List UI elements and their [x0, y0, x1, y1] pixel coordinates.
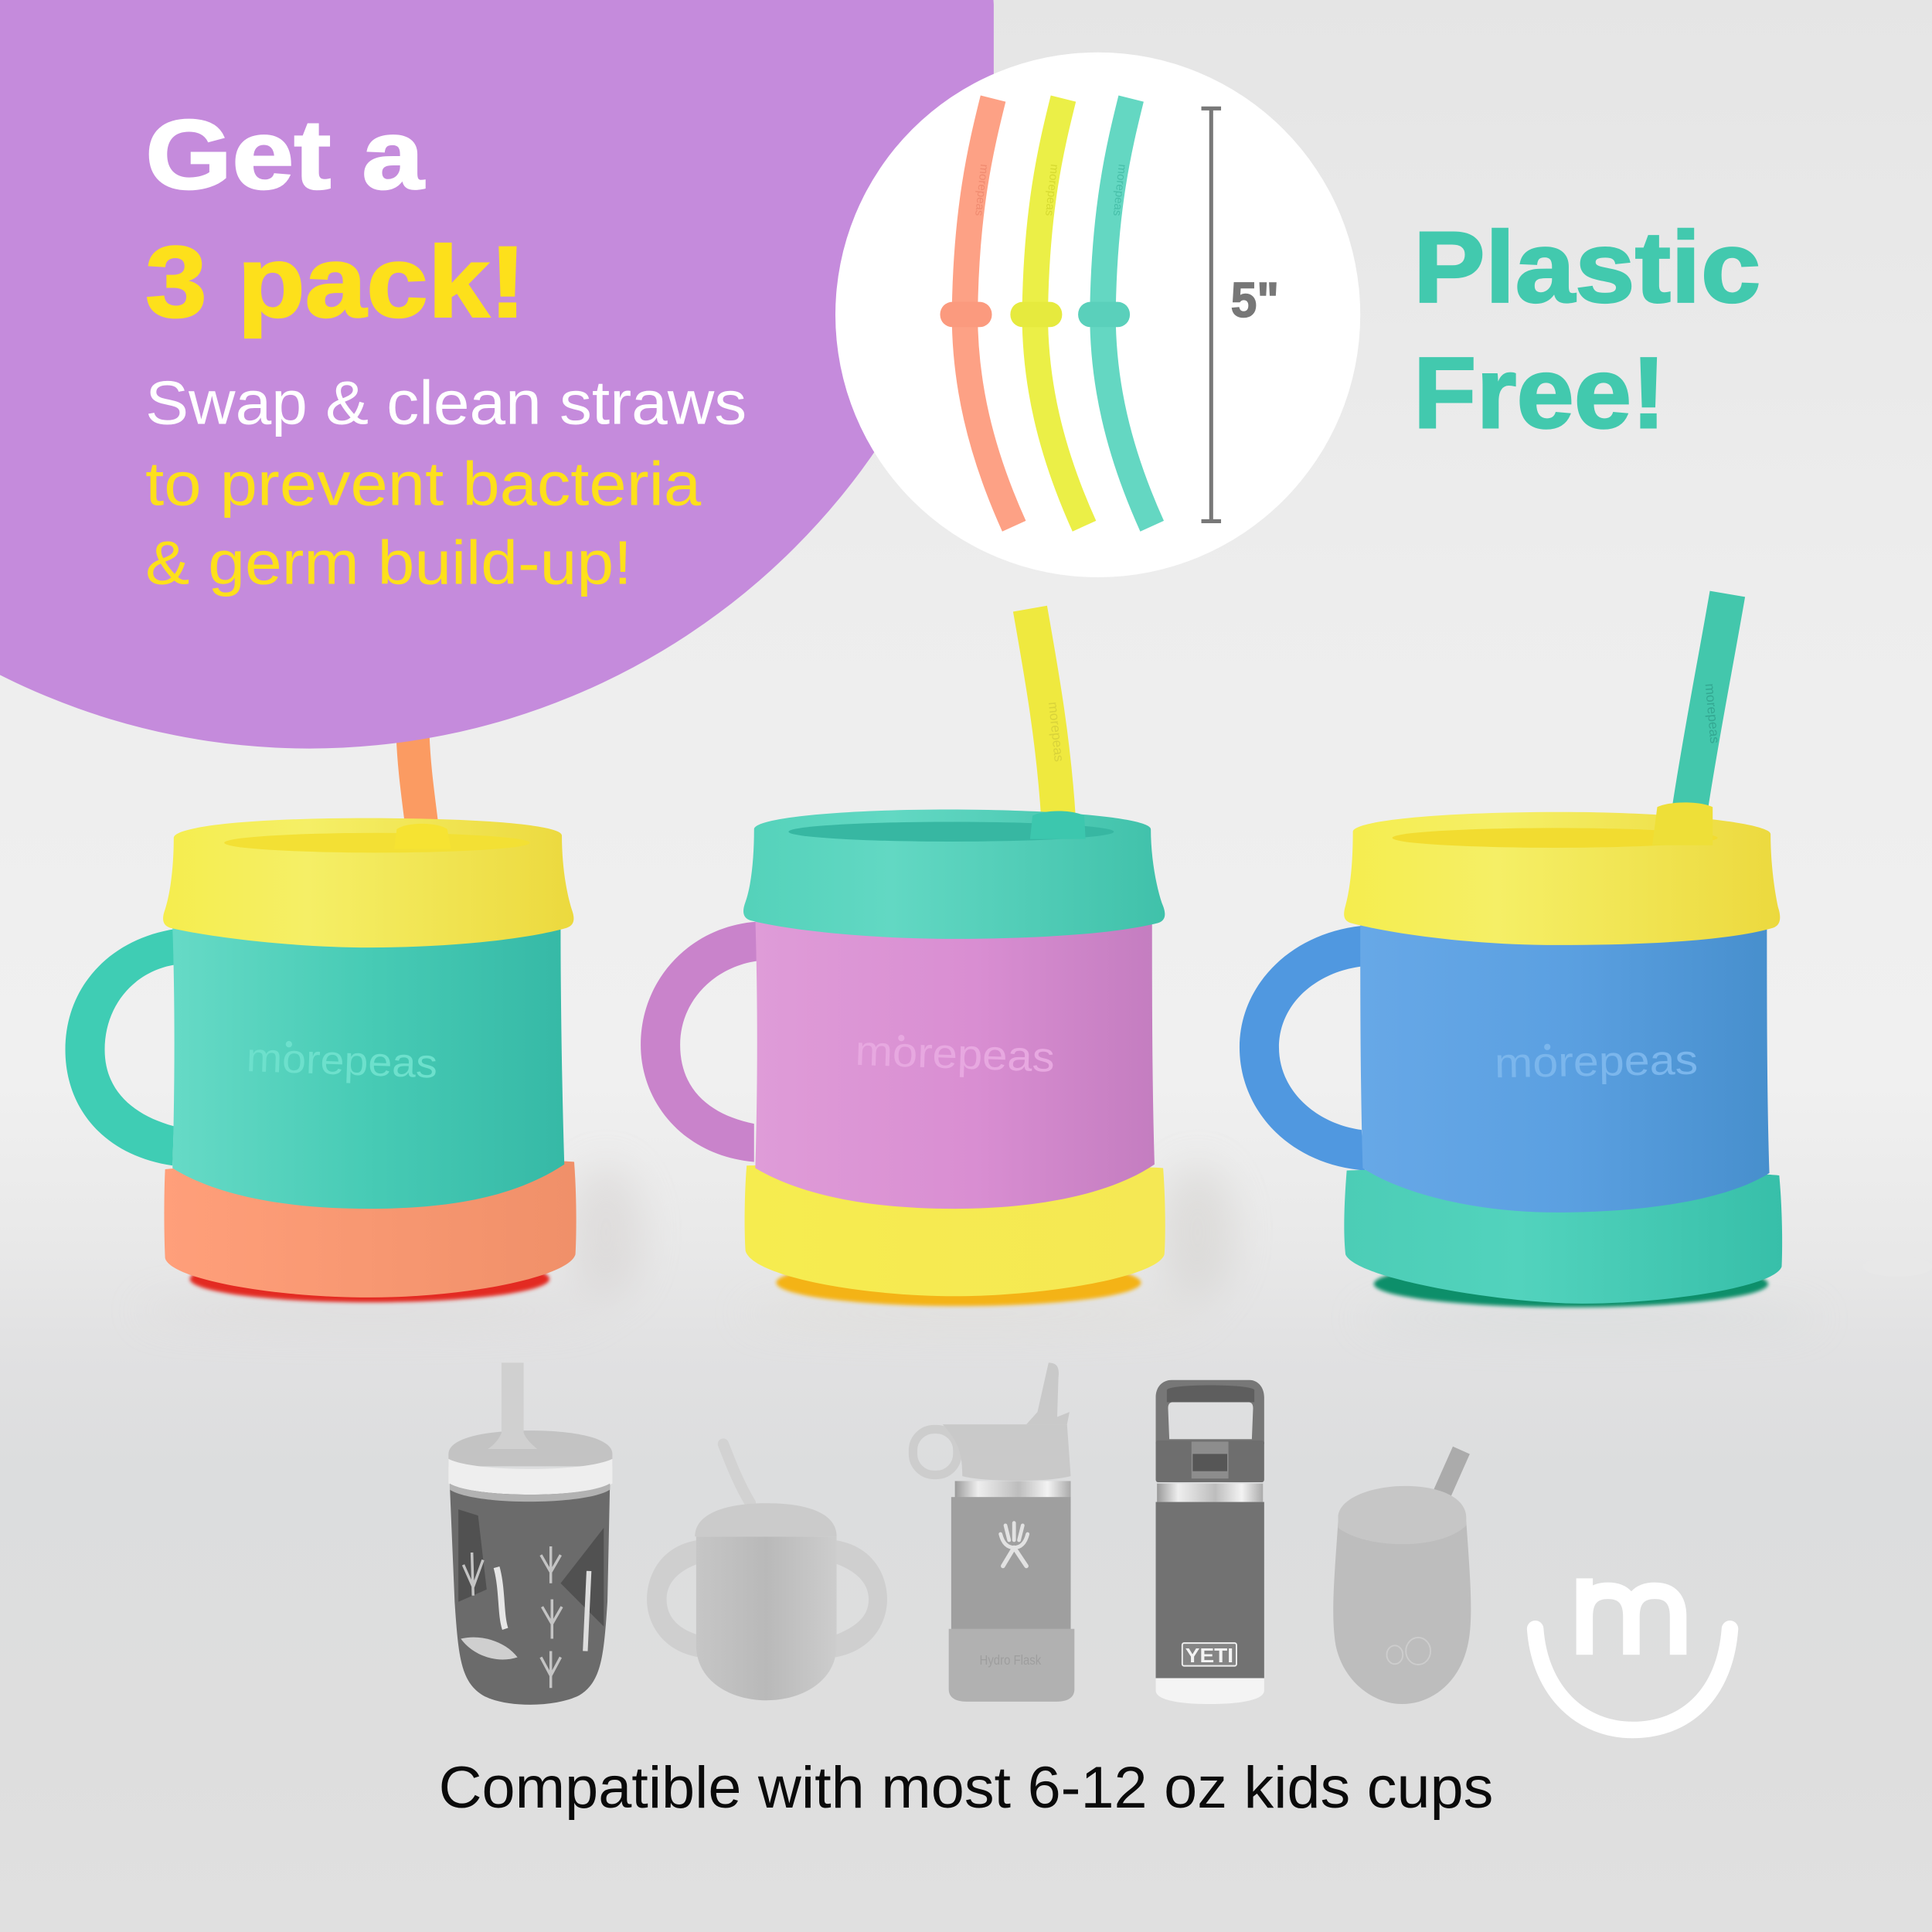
bottle straw: [1026, 1362, 1070, 1424]
bottle boot label: Hydro Flask: [980, 1652, 1041, 1668]
yeti base: [1156, 1679, 1264, 1704]
cup body: [696, 1536, 837, 1700]
straw: yellow: morepeas: [1043, 164, 1061, 217]
spout: [394, 824, 451, 849]
straw: coral: morepeas: [972, 164, 991, 217]
logo: morepeas smile: [1536, 1578, 1730, 1730]
measurement bar: [1202, 108, 1221, 521]
small spill on table: [1863, 1257, 1932, 1277]
straw: coral: [940, 99, 1014, 526]
cup lid: [695, 1503, 837, 1536]
handle: [66, 929, 175, 1165]
straw: teal: morepeas: [1111, 164, 1129, 217]
tumbler lid: [448, 1430, 612, 1466]
body: [1360, 924, 1770, 1213]
heading: plastic free: Free!: [1413, 336, 1666, 449]
cup: kids tumbler: [448, 1362, 612, 1705]
text block: swap and clean: [145, 368, 747, 597]
text block: swap and clean: & germ build-up!: [145, 529, 632, 597]
straw: orange: [413, 734, 423, 833]
mug: blue with yellow lid and teal base: morepeas: [1702, 682, 1723, 744]
yeti badge: YETI: [1185, 1645, 1233, 1667]
heading: get a 3 pack: [145, 100, 526, 338]
mini cup lid: [1338, 1486, 1466, 1544]
heading: plastic free: [1413, 211, 1760, 449]
handle: [1240, 925, 1368, 1171]
lid: [743, 810, 1165, 939]
spout: [1652, 802, 1713, 845]
straw: teal: [1689, 594, 1727, 813]
yeti body: [1156, 1502, 1264, 1679]
logo: morepeas: [1494, 1037, 1699, 1087]
base: [745, 1165, 1165, 1296]
logo: morepeas: [855, 1028, 1056, 1081]
cup: hydro flask bottle: [913, 1362, 1074, 1702]
heading: get a 3 pack: 3 pack!: [145, 226, 526, 338]
yeti steel ring: [1157, 1484, 1263, 1502]
tumbler band: [448, 1459, 612, 1495]
text block: swap and clean: to prevent bacteria: [145, 450, 702, 519]
under-base reflection: [1374, 1260, 1768, 1308]
mini cup straw: [1437, 1451, 1461, 1505]
purple blob panel: [0, 0, 996, 749]
measurement label: 5": [1231, 272, 1279, 328]
tumbler straw: [488, 1362, 537, 1449]
cup straw: [723, 1444, 750, 1503]
tumbler pattern: [458, 1509, 604, 1688]
cup: yeti bottle: [1156, 1380, 1264, 1704]
text block: swap and clean: Swap & clean straws: [145, 368, 747, 437]
heading: plastic free: Plastic: [1413, 211, 1760, 324]
body: [172, 927, 564, 1209]
mini cup logo: [1386, 1638, 1430, 1665]
cup handles: [647, 1540, 699, 1657]
under-base reflection: [190, 1256, 549, 1302]
bottle body: [951, 1497, 1071, 1630]
mini cup body: [1333, 1522, 1471, 1704]
lid: [163, 818, 573, 947]
lid: [1344, 812, 1780, 945]
mug: pink with teal lid and yellow base: morepeas: [1046, 701, 1067, 763]
mug: teal with yellow lid and coral base: [66, 734, 577, 1302]
logo: morepeas: [246, 1035, 438, 1087]
bottle steel ring: [955, 1481, 1071, 1498]
mug shadows: [135, 1165, 1824, 1333]
spout: [1030, 811, 1086, 839]
straw: teal: [1078, 99, 1152, 526]
base: [164, 1161, 577, 1298]
straw: yellow: [1030, 609, 1059, 818]
yeti cap: [1156, 1440, 1264, 1482]
under-base reflection: [776, 1259, 1141, 1306]
caption: Compatible with most 6-12 oz kids cups: [439, 1755, 1493, 1821]
mug: pink with teal lid and yellow base: [641, 609, 1165, 1306]
tumbler body: [450, 1485, 610, 1705]
mug: blue with yellow lid and teal base: [1240, 594, 1782, 1308]
straw: yellow: [1010, 99, 1084, 526]
heading: get a 3 pack: Get a: [145, 100, 425, 210]
bottle logo: [1001, 1523, 1028, 1566]
body: [755, 918, 1155, 1209]
base: [1344, 1169, 1782, 1304]
bottle loop: [913, 1429, 957, 1475]
bottle lid: [943, 1424, 1071, 1481]
cup: ezpz mini cup: [1333, 1451, 1471, 1704]
yeti handle: [1156, 1380, 1264, 1444]
bottle boot: [949, 1629, 1074, 1702]
straws panel circle: [835, 53, 1360, 577]
cup: two-handled silicone cup: [647, 1444, 887, 1700]
handle: [641, 922, 757, 1162]
